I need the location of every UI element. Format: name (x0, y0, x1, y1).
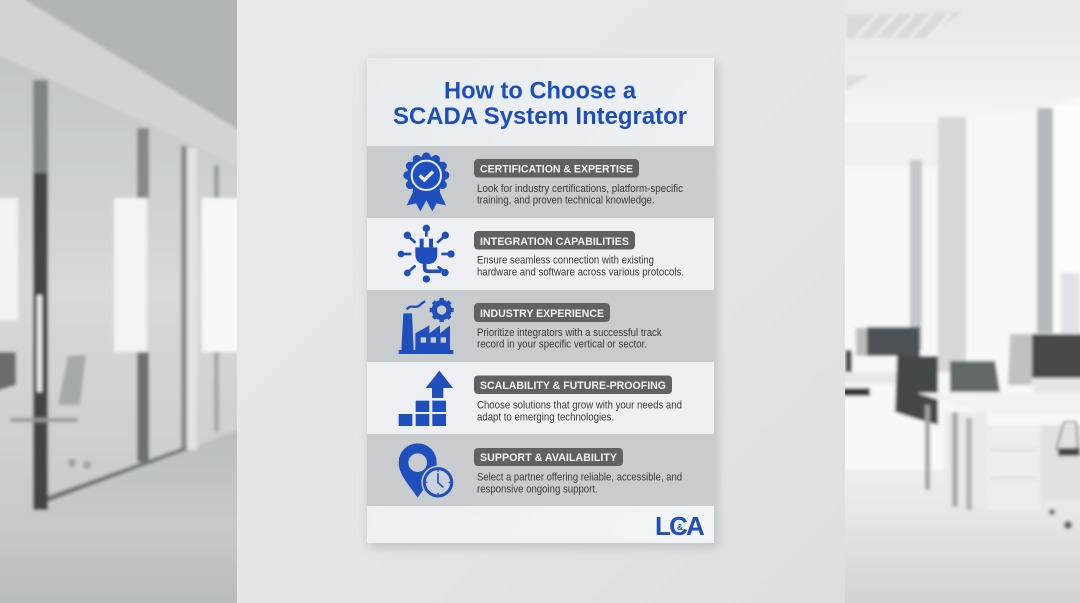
description: certification: Look for industry certifications, platform-specific (477, 183, 684, 195)
logo: LC&A: LCA (655, 511, 705, 541)
row 5: support (367, 434, 714, 506)
wall (237, 0, 845, 603)
description: scalability: Choose solutions that grow with your needs and (477, 399, 682, 411)
row 2: integration (367, 218, 714, 290)
description: support: Select a partner offering reliable, accessible, and (477, 472, 682, 484)
label: integration: INTEGRATION CAPABILITIES (480, 236, 629, 248)
title: How to Choose a (444, 78, 636, 104)
icon: plug with nodes (398, 225, 455, 283)
label: industry: INDUSTRY EXPERIENCE (480, 308, 604, 320)
description: scalability (477, 399, 682, 423)
row 4: scalability (367, 362, 714, 434)
label: industry (474, 303, 610, 322)
description: certification (477, 183, 684, 207)
description: industry: Prioritize integrators with a successful track (477, 327, 662, 339)
description: industry (477, 327, 662, 351)
description: industry: record in your specific vertical or sector. (477, 339, 647, 351)
logo: LC&A: & (677, 522, 683, 532)
description: certification: training, and proven technical knowledge. (477, 195, 654, 207)
row 3: industry (367, 290, 714, 362)
poster panel (367, 58, 714, 543)
description: scalability: adapt to emerging technologies. (477, 411, 614, 423)
icon: award badge (403, 152, 449, 211)
description: integration (477, 255, 684, 279)
background: open-plan office (830, 0, 1080, 603)
description: support (477, 472, 682, 496)
description: integration: Ensure seamless connection with existing (477, 255, 654, 267)
label: scalability (474, 376, 672, 394)
description: integration: hardware and software across various protocols. (477, 267, 684, 279)
row 1: certification (367, 146, 714, 218)
icon: map pin with clock (399, 443, 455, 499)
poster shadow (368, 62, 718, 548)
label: scalability: SCALABILITY & FUTURE-PROOFING (480, 380, 666, 392)
label: support: SUPPORT & AVAILABILITY (480, 452, 617, 464)
icon: stair blocks with arrow (399, 371, 453, 426)
icon: factory and gear (399, 298, 454, 354)
title (393, 78, 687, 130)
label: certification (474, 159, 639, 178)
background: glass office corridor (0, 0, 250, 603)
label: support (474, 448, 623, 466)
label: certification: CERTIFICATION & EXPERTISE (480, 164, 633, 176)
description: support: responsive ongoing support. (477, 484, 598, 496)
title: SCADA System Integrator (393, 103, 687, 130)
label: integration (474, 231, 635, 250)
